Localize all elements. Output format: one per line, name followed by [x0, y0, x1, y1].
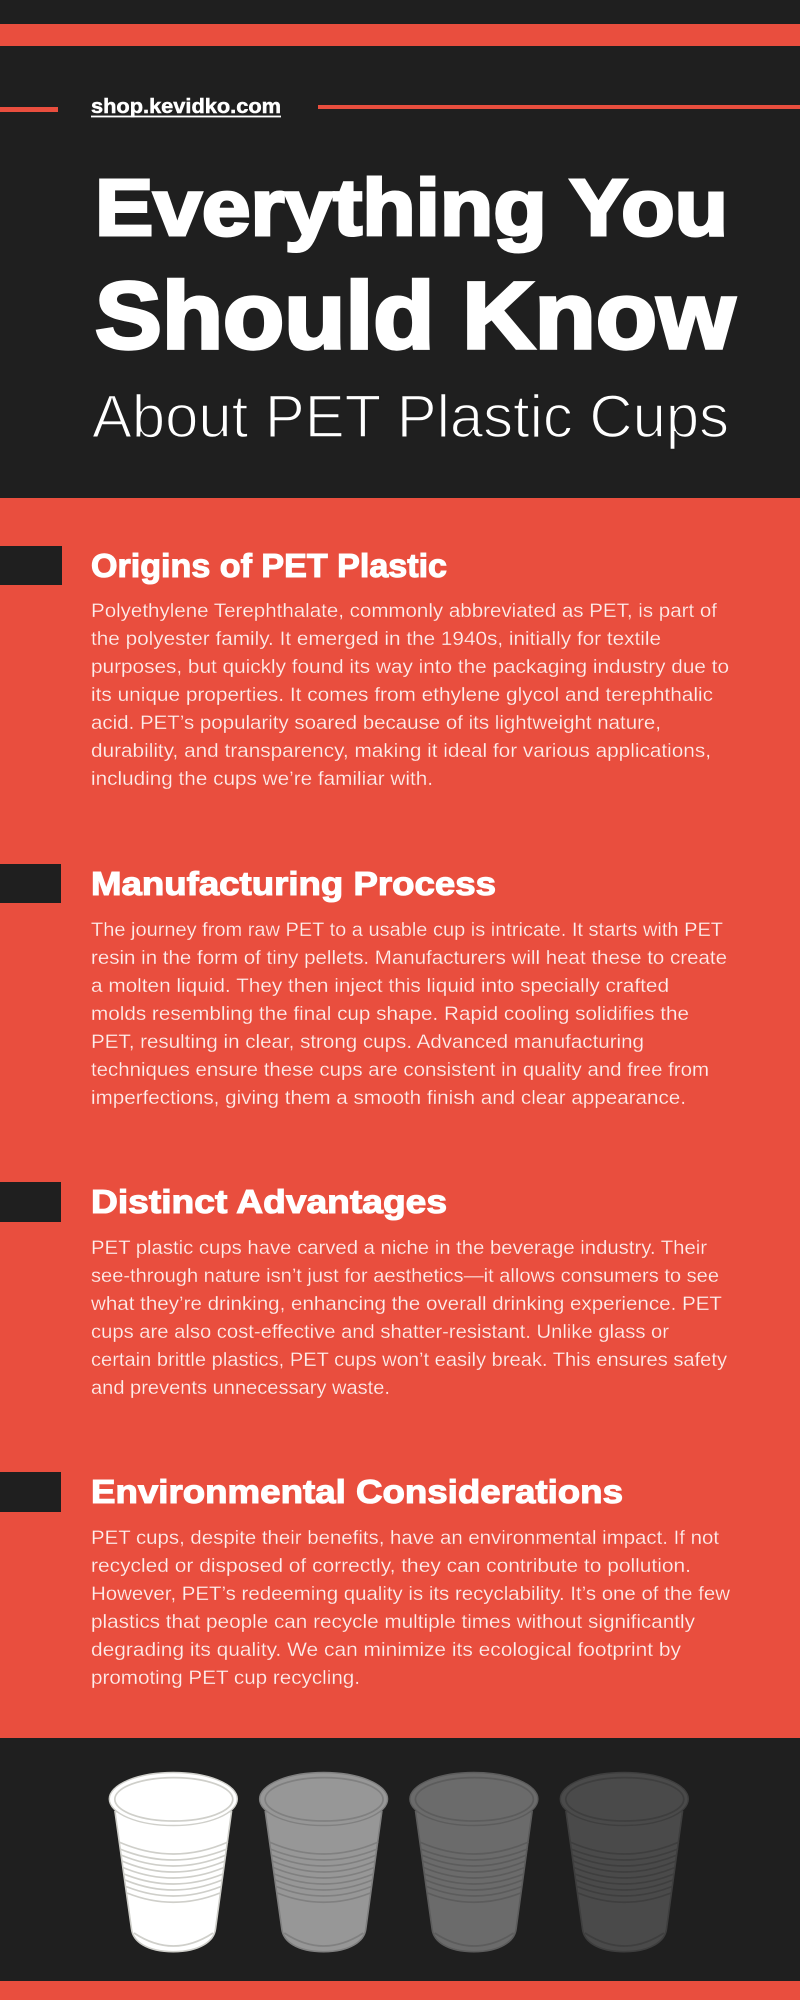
left accent line: [0, 107, 58, 112]
cups row: [109, 1772, 688, 1952]
title: Should Know: [95, 263, 736, 369]
title: Everything You: [95, 163, 728, 252]
section: origins of PET plastic: [0, 546, 729, 790]
bottom accent bar: [0, 1981, 800, 2000]
heading: Distinct Advantages: [91, 1183, 447, 1220]
body text: its unique properties. It comes from ethylene glycol and terephthalic: [91, 685, 713, 706]
section: distinct advantages: [0, 1182, 728, 1399]
body text: including the cups we’re familiar with.: [91, 769, 433, 790]
red content panel: [0, 498, 800, 1738]
body text: PET, resulting in clear, strong cups. Advanced manufacturing: [91, 1032, 644, 1053]
title: [92, 163, 736, 450]
body text: cups are also cost-effective and shatter-resistant. Unlike glass or: [91, 1322, 670, 1343]
body text: PET cups, despite their benefits, have an environmental impact. If not: [91, 1528, 720, 1549]
body text: what they’re drinking, enhancing the overall drinking experience. PET: [90, 1294, 722, 1315]
icon: dark grey cup: [560, 1772, 688, 1952]
section: manufacturing process: [0, 864, 727, 1109]
body text: resin in the form of tiny pellets. Manufacturers will heat these to create: [91, 948, 727, 969]
body text: acid. PET’s popularity soared because of its lightweight nature,: [91, 713, 661, 734]
section: environmental considerations: [0, 1472, 730, 1689]
icon: mid grey cup: [410, 1772, 538, 1952]
body text: plastics that people can recycle multiple times without significantly: [91, 1612, 696, 1633]
body text: The journey from raw PET to a usable cup is intricate. It starts with PET: [91, 920, 723, 941]
body text: molds resembling the final cup shape. Rapid cooling solidifies the: [91, 1004, 689, 1025]
body text: However, PET’s redeeming quality is its recyclability. It’s one of the few: [91, 1584, 730, 1605]
footer band: [0, 1738, 800, 1981]
body text: techniques ensure these cups are consistent in quality and free from: [91, 1060, 709, 1081]
body text: [91, 601, 729, 790]
body text: and prevents unnecessary waste.: [91, 1378, 390, 1399]
website link: shop.kevidko.com: [91, 96, 281, 118]
body text: promoting PET cup recycling.: [91, 1668, 360, 1689]
body text: durability, and transparency, making it ideal for various applications,: [91, 741, 711, 762]
header background: [0, 0, 800, 498]
icon: white cup: [109, 1772, 237, 1952]
body text: see-through nature isn’t just for aesthetics—it allows consumers to see: [91, 1266, 719, 1287]
body text: Polyethylene Terephthalate, commonly abbreviated as PET, is part of: [91, 601, 718, 622]
right accent line: [318, 105, 800, 109]
section marker: [0, 546, 62, 585]
body text: imperfections, giving them a smooth finish and clear appearance.: [91, 1088, 686, 1109]
section marker: [0, 1472, 61, 1512]
heading: Environmental Considerations: [91, 1473, 623, 1510]
section marker: [0, 864, 61, 903]
heading: Origins of PET Plastic: [91, 547, 447, 584]
body text: PET plastic cups have carved a niche in the beverage industry. Their: [91, 1238, 708, 1259]
body text: certain brittle plastics, PET cups won’t easily break. This ensures safety: [91, 1350, 728, 1371]
body text: recycled or disposed of correctly, they can contribute to pollution.: [91, 1556, 691, 1577]
body text: a molten liquid. They then inject this liquid into specially crafted: [91, 976, 669, 997]
body text: purposes, but quickly found its way into the packaging industry due to: [91, 657, 729, 678]
body text: degrading its quality. We can minimize its ecological footprint by: [91, 1640, 682, 1661]
title: About PET Plastic Cups: [92, 383, 729, 450]
body text: [91, 920, 727, 1109]
body text: the polyester family. It emerged in the 1940s, initially for textile: [91, 629, 661, 650]
top accent bar: [0, 24, 800, 46]
body text: [90, 1238, 728, 1399]
section marker: [0, 1182, 61, 1222]
body text: [91, 1528, 730, 1689]
icon: light grey cup: [260, 1772, 388, 1952]
heading: Manufacturing Process: [91, 865, 496, 902]
